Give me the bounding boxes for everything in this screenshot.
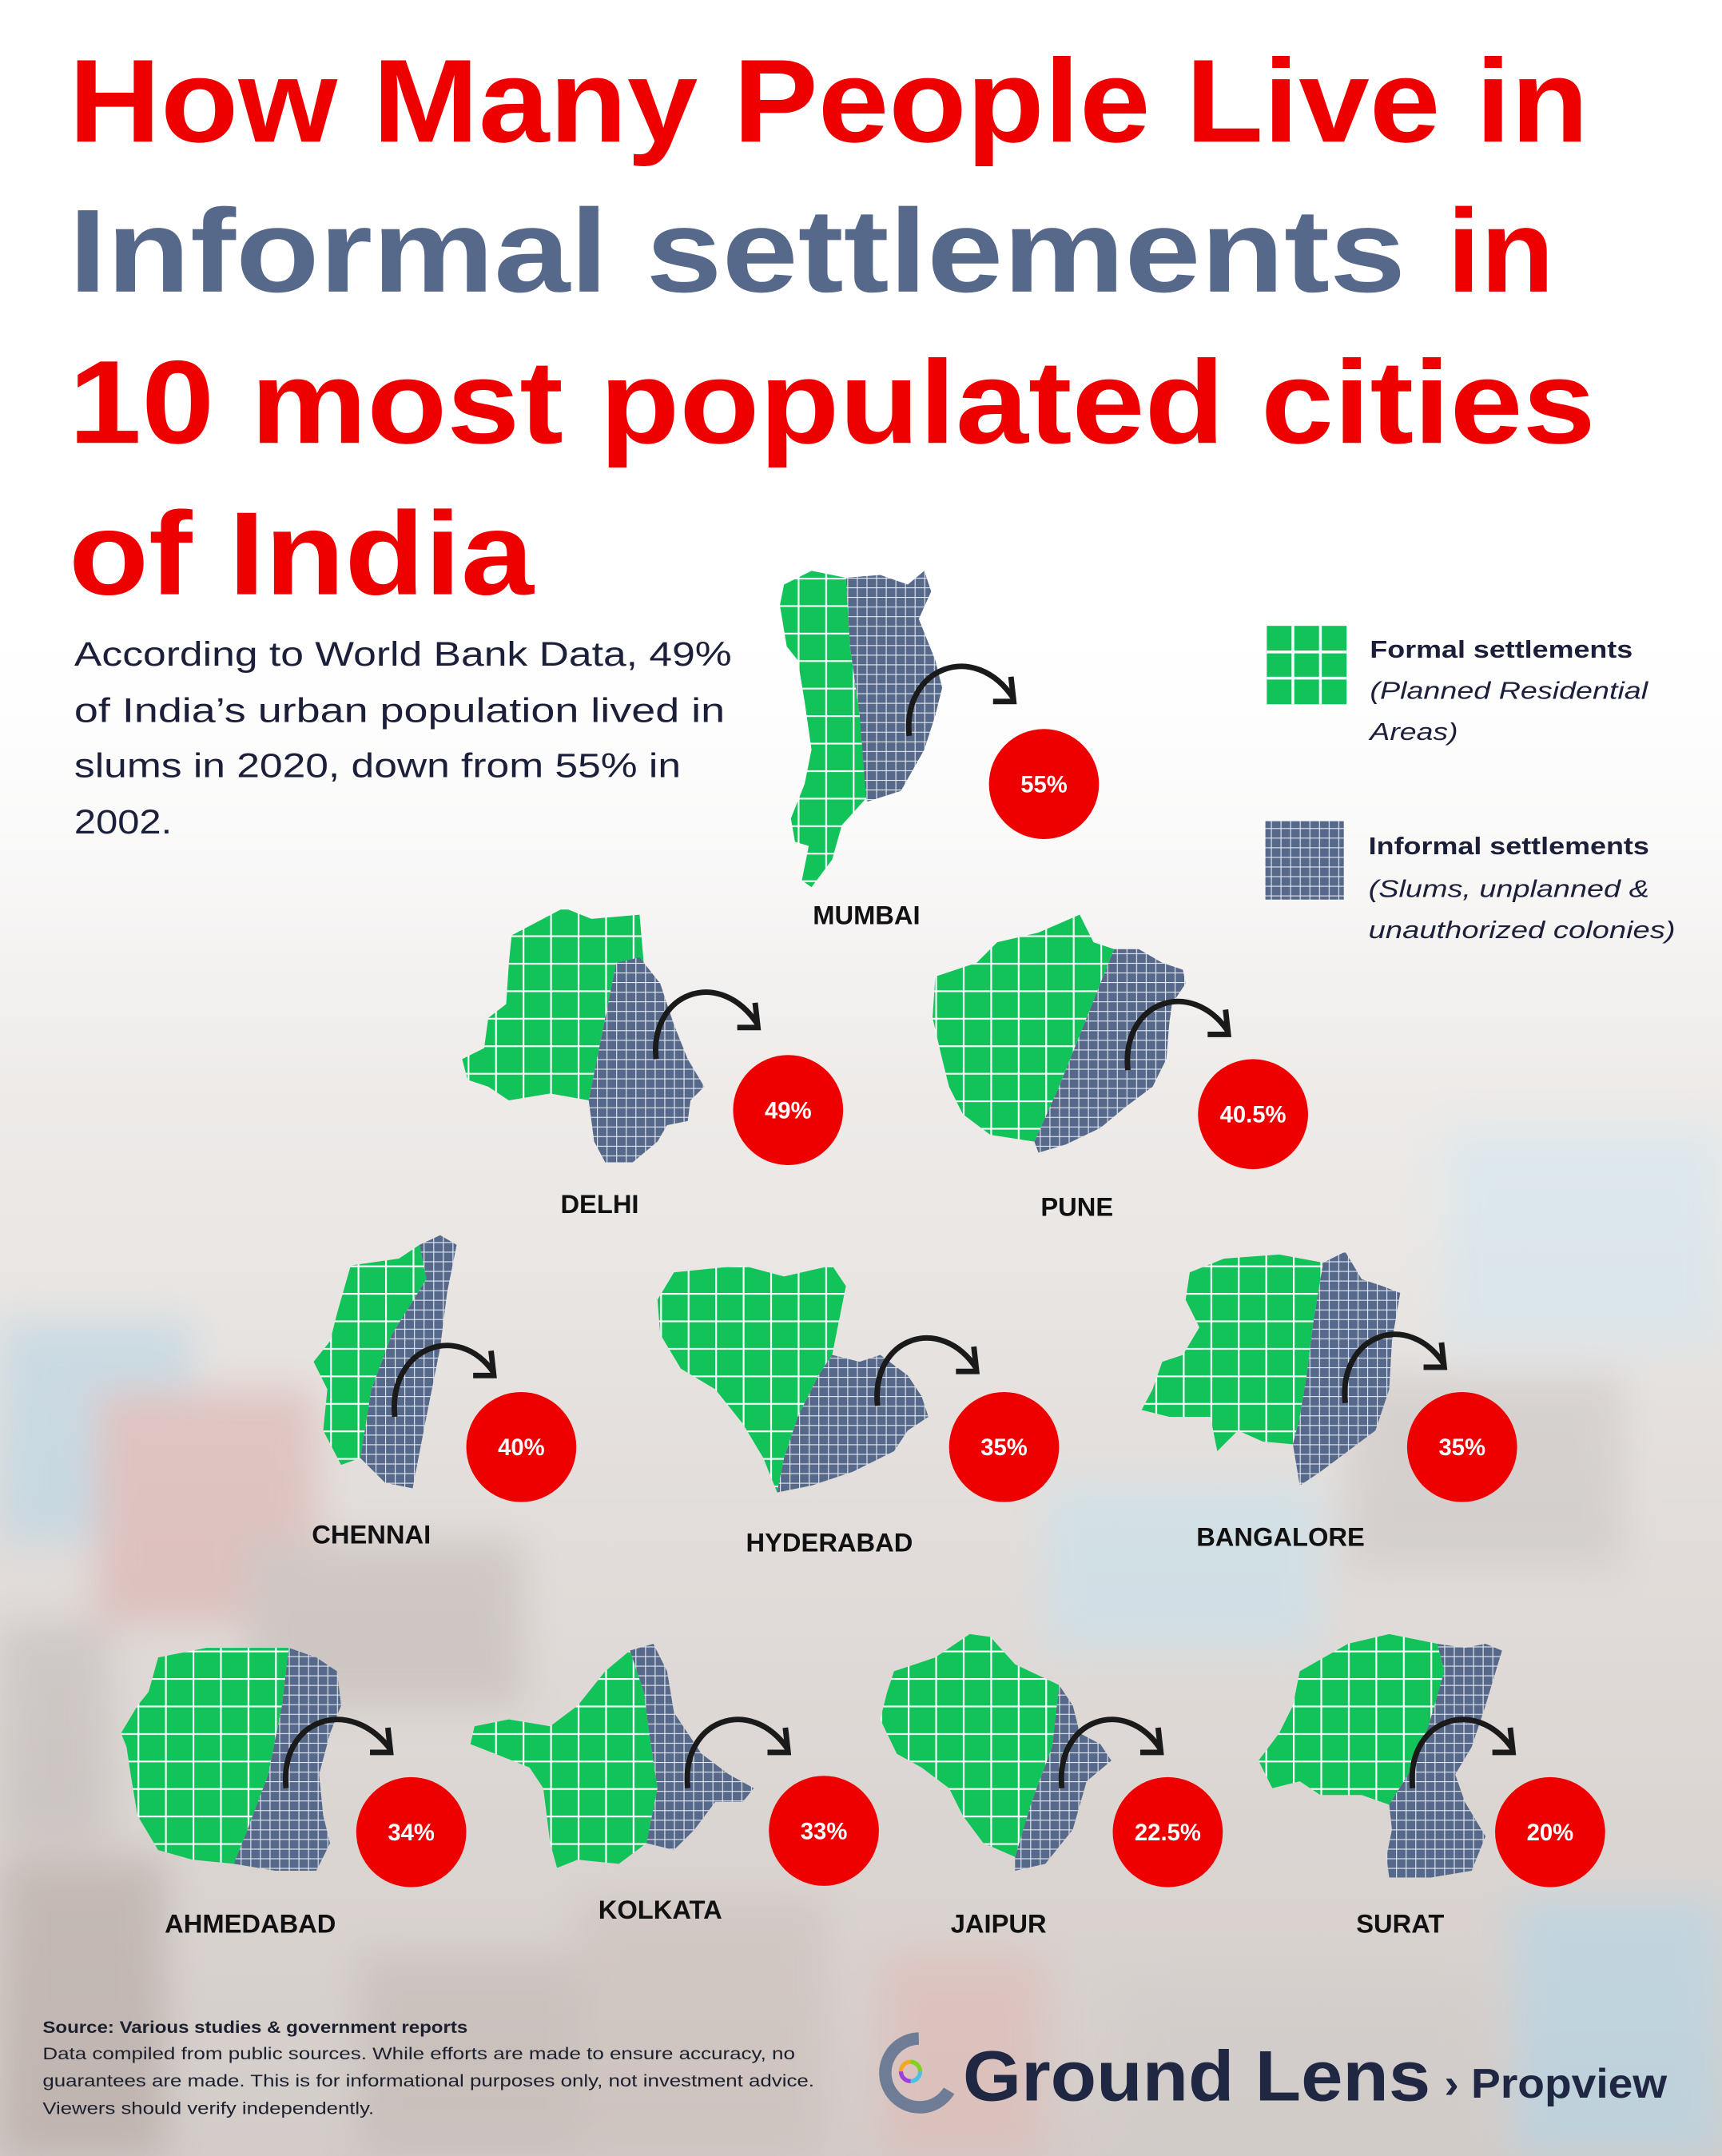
legend: informal: (Slums, unplanned & [1369,874,1649,902]
city: Bangalore: 35% [1438,1435,1485,1461]
legend: informal [1266,821,1676,944]
city: Ahmedabad: 34% [388,1820,435,1846]
title: 10 most populated cities [69,336,1596,468]
source & disclaimer: guarantees are made. This is for informational purposes only, not investment advice. [42,2071,814,2090]
source & disclaimer: Source: Various studies & government reports [42,2018,467,2037]
intro paragraph: According to World Bank Data, 49% [74,635,732,674]
logo: Ground Lens Propview: › Propview [1444,2060,1668,2106]
city: Jaipur [881,1634,1223,1938]
city: Delhi: DELHI [560,1189,639,1219]
title: of India [69,488,535,620]
source & disclaimer [42,2018,814,2118]
city: Jaipur: JAIPUR [951,1908,1047,1938]
city: Delhi: 49% [765,1098,812,1124]
city: Pune: 40.5% [1220,1103,1287,1128]
intro paragraph: slums in 2020, down from 55% in [74,747,681,786]
intro paragraph [74,635,732,841]
city: Chennai: 40% [498,1435,545,1461]
legend [1266,626,1676,944]
city: Ahmedabad [121,1648,467,1938]
city: Mumbai: 55% [1020,772,1068,798]
city: Bangalore: BANGALORE [1196,1522,1365,1552]
city: Delhi [462,908,843,1219]
legend: informal: Informal settlements [1369,832,1649,860]
title [69,35,1596,620]
legend: formal: Areas) [1368,718,1458,746]
city: Pune: PUNE [1040,1192,1113,1222]
city: Kolkata: KOLKATA [599,1895,722,1924]
legend: informal: unauthorized colonies) [1369,916,1676,944]
city: Mumbai [780,571,1099,930]
city: Surat [1259,1634,1605,1938]
icon: lens ring [885,2039,949,2107]
source & disclaimer: Data compiled from public sources. While efforts are made to ensure accuracy, no [42,2044,795,2063]
city: Surat: SURAT [1356,1908,1444,1938]
logo: Ground Lens Propview: Ground Lens [963,2035,1430,2115]
city: Ahmedabad: AHMEDABAD [165,1908,336,1938]
intro paragraph: of India’s urban population lived in [74,692,725,730]
city: Hyderabad: HYDERABAD [746,1528,913,1557]
city: Kolkata [471,1644,879,1924]
city: Jaipur: 22.5% [1135,1820,1201,1846]
title: Informal settlements [69,185,1406,317]
city: Chennai [312,1235,576,1549]
city: Bangalore [1142,1251,1517,1552]
logo: Ground Lens Propview [885,2035,1668,2115]
legend: formal [1267,626,1648,746]
intro paragraph: 2002. [74,803,172,841]
legend: formal: Formal settlements [1370,635,1633,663]
source & disclaimer: Viewers should verify independently. [42,2099,374,2118]
title: in [1447,185,1554,317]
city: Hyderabad: 35% [980,1435,1028,1461]
city: Hyderabad [658,1266,1059,1557]
title: How Many People Live in [69,35,1589,167]
city: Surat: 20% [1527,1820,1573,1846]
city: Kolkata: 33% [801,1819,847,1844]
city: Chennai: CHENNAI [312,1519,431,1549]
city: Mumbai: MUMBAI [813,901,921,930]
legend: formal: (Planned Residential [1370,676,1648,704]
city: Pune [933,915,1308,1222]
